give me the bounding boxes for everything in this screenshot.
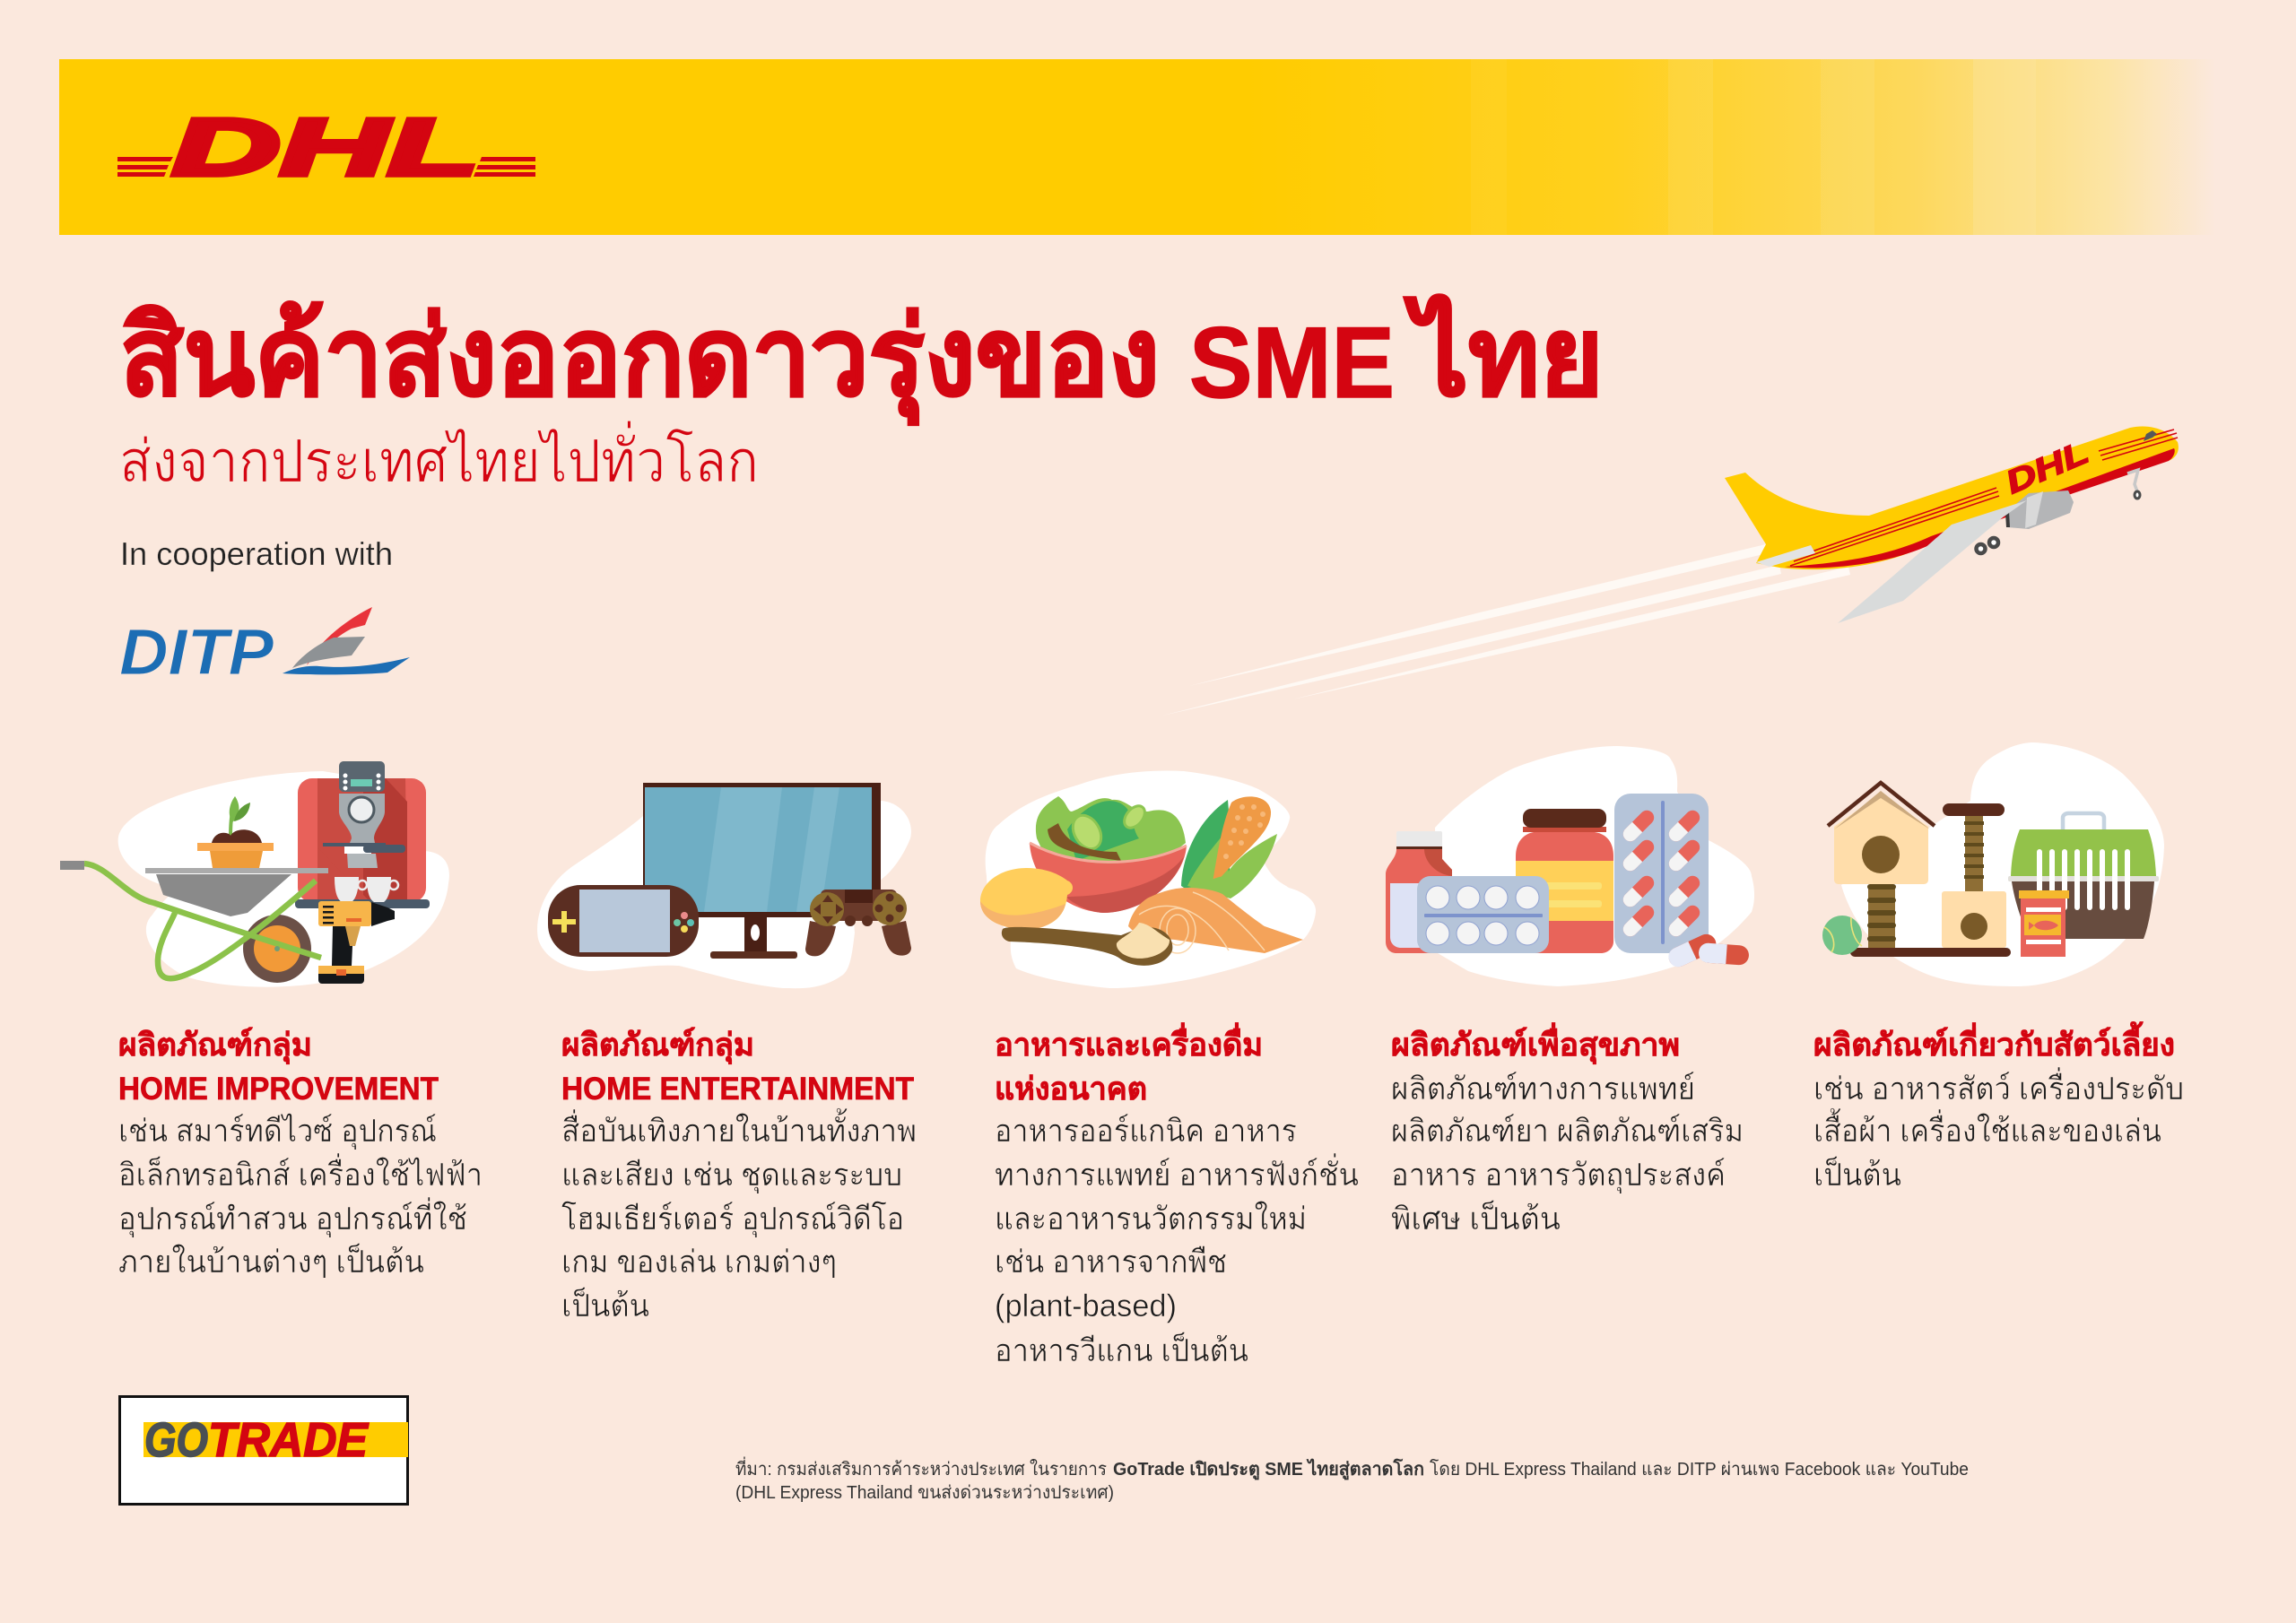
game controller [805, 890, 911, 956]
text block: future food: อาหารวีแกน เป็นต้น [995, 1332, 1248, 1368]
text block: future food: อาหารออร์แกนิค อาหาร [995, 1114, 1297, 1149]
text block: home entertainment: โฮมเธียร์เตอร์ อุปกรณ์วิดีโอ [561, 1201, 904, 1237]
header banner [59, 59, 2215, 235]
scratching post [1850, 803, 2011, 957]
icon: pet products [1822, 742, 2164, 986]
source note: (DHL Express Thailand ขนส่งด่วนระหว่างประเทศ) [735, 1483, 1114, 1503]
coffee machine [295, 761, 430, 908]
contrails [1162, 543, 1850, 716]
source note: ที่มา: กรมส่งเสริมการค้าระหว่างประเทศ ในรายการ [735, 1456, 1107, 1480]
cockpit [2144, 430, 2157, 441]
bottle [1386, 831, 1452, 953]
spoon [1002, 923, 1172, 966]
airplane with contrails [1162, 426, 2179, 716]
GoTrade logo: TRADE [208, 1413, 370, 1467]
tailplane [1756, 545, 1815, 567]
GoTrade logo [120, 1397, 408, 1505]
GoTrade logo: GO [144, 1413, 208, 1467]
text block: health products: พิเศษ เป็นต้น [1391, 1200, 1561, 1237]
text block: home improvement: เช่น สมาร์ทดีไวซ์ อุปกรณ์ [118, 1113, 437, 1150]
text block: pet products: เป็นต้น [1813, 1156, 1901, 1193]
salmon [1128, 888, 1303, 953]
icon: future food [980, 771, 1316, 988]
red belly [1785, 448, 2175, 568]
text block: future food: (plant-based) [995, 1289, 1177, 1324]
loose capsules [1665, 931, 1750, 970]
text block: future food: ทางการแพทย์ อาหารฟังก์ชั่น [995, 1153, 1359, 1193]
text block: home entertainment: เกม ของเล่น เกมต่างๆ [561, 1245, 837, 1280]
text block: future food [995, 1022, 1359, 1368]
text block: home entertainment: เป็นต้น [561, 1287, 649, 1324]
text block: pet products: เช่น อาหารสัตว์ เครื่องประดับ [1813, 1067, 2184, 1107]
title: สินค้าส่งออกดาวรุ่งของ [120, 296, 1160, 425]
blob [118, 771, 449, 987]
pet carrier [2008, 813, 2159, 939]
tail fin and fuselage [1725, 426, 2179, 569]
icon: health products [1386, 746, 1754, 986]
source note: โดย DHL Express Thailand และ DITP ผ่านเพจ Facebook และ YouTube [1430, 1459, 1969, 1480]
text block: home entertainment: สื่อบันเทิงภายในบ้านทั้งภาพ [561, 1107, 917, 1149]
text block: home improvement: ผลิตภัณฑ์กลุ่ม [118, 1027, 312, 1064]
subtitle: ส่งจากประเทศไทยไปทั่วโลก [119, 421, 759, 494]
tennis ball [1822, 916, 1862, 955]
text block: home entertainment: HOME ENTERTAINMENT [561, 1072, 914, 1107]
wheelbarrow [60, 861, 328, 983]
text block: pet products: เสื้อผ้า เครื่องใช้และของเล่น [1813, 1107, 2161, 1149]
DHL logo [117, 103, 535, 193]
text block: future food: อาหารและเครื่องดื่ม [995, 1022, 1263, 1063]
cat house [1828, 783, 1935, 948]
text block: future food: และอาหารนวัตกรรมใหม่ [995, 1201, 1307, 1237]
text block: health products: ผลิตภัณฑ์เพื่อสุขภาพ [1391, 1022, 1680, 1064]
text block: home entertainment: และเสียง เช่น ชุดและระบบ [561, 1158, 902, 1193]
text block: health products: ผลิตภัณฑ์ยา ผลิตภัณฑ์เสริม [1391, 1114, 1744, 1149]
tablet blister [1417, 876, 1549, 953]
main wheels [1977, 538, 1998, 553]
icon: home improvement [60, 761, 449, 987]
handheld console [548, 885, 699, 957]
DITP logo [119, 607, 410, 689]
text block: future food: เช่น อาหารจากพืช [995, 1245, 1227, 1280]
text block: home entertainment [561, 1027, 917, 1324]
television [643, 783, 881, 959]
large jar [1516, 809, 1613, 953]
text block: future food: แห่งอนาคต [995, 1072, 1147, 1107]
blob [1435, 746, 1754, 986]
corn [1181, 796, 1277, 898]
text block: home improvement: ภายในบ้านต่างๆ เป็นต้น [118, 1243, 424, 1280]
blob [1841, 742, 2164, 986]
text block: home improvement: HOME IMPROVEMENT [118, 1072, 439, 1107]
red stripes [1790, 430, 2178, 566]
lemon [980, 868, 1073, 930]
text block: pet products: ผลิตภัณฑ์เกี่ยวกับสัตว์เลี้ยง [1813, 1021, 2175, 1063]
drill [318, 901, 395, 984]
text block: home improvement: อิเล็กทรอนิกส์ เครื่องใช้ไฟฟ้า [118, 1153, 483, 1193]
salad bowl [1030, 796, 1187, 913]
DHL logo: DHL [172, 103, 479, 193]
title [120, 295, 1604, 425]
blob [537, 801, 911, 988]
blob [986, 771, 1316, 988]
text block: health products: ผลิตภัณฑ์ทางการแพทย์ [1391, 1072, 1695, 1107]
cooperation label: In cooperation with [120, 535, 393, 572]
DITP logo: DITP [119, 617, 274, 689]
wing [1838, 500, 2027, 623]
fuselage logo: DHL [2000, 433, 2093, 500]
text block: health products [1391, 1022, 1744, 1237]
title: SME [1189, 307, 1395, 419]
title: ไทย [1404, 295, 1604, 418]
text block: home entertainment: ผลิตภัณฑ์กลุ่ม [561, 1027, 754, 1064]
engine [2005, 490, 2074, 529]
text block: home improvement: อุปกรณ์ทำสวน อุปกรณ์ที่ใช้ [118, 1197, 467, 1237]
text block: health products: อาหาร อาหารวัตถุประสงค์ [1391, 1158, 1726, 1193]
text block: pet products [1813, 1021, 2184, 1193]
text block: home improvement [118, 1027, 483, 1280]
nose gear [2127, 470, 2140, 499]
source note [735, 1456, 1969, 1503]
potted plant [197, 796, 274, 868]
icon: home entertainment [537, 783, 911, 988]
source note: GoTrade เปิดประตู SME ไทยสู่ตลาดโลก [1113, 1458, 1424, 1481]
capsule blister [1614, 794, 1709, 953]
pet food can [2019, 890, 2069, 957]
